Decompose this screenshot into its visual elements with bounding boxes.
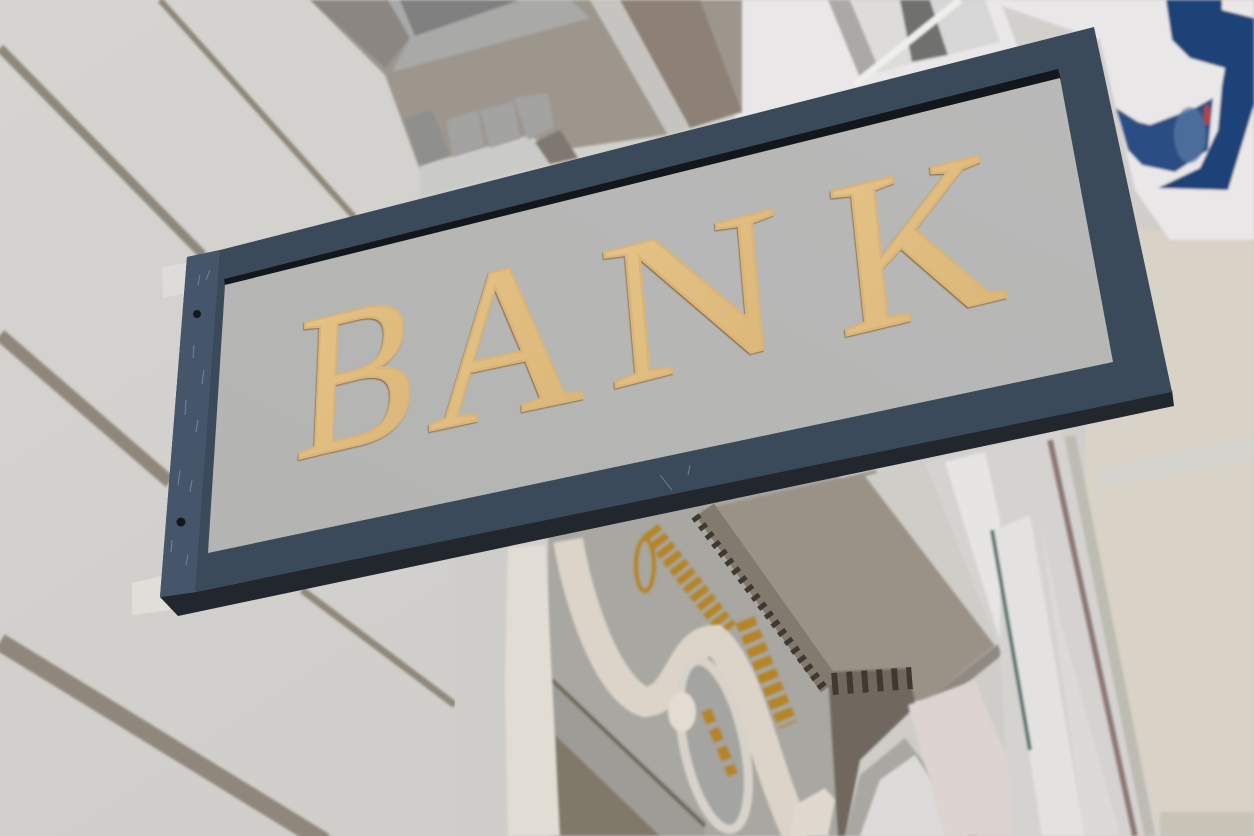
gilded lettering on shopfront [636, 530, 788, 725]
letter A: A [422, 204, 586, 479]
white carved garland column [505, 540, 835, 836]
letter N: N [593, 160, 793, 434]
bank lettering [292, 101, 1013, 506]
flag at top right [985, 0, 1254, 240]
sign speckles [171, 270, 690, 565]
eave canopy at right [700, 462, 1010, 836]
far building at right [1085, 230, 1254, 836]
sign underside [160, 390, 1174, 616]
sign left frame side [160, 250, 220, 597]
wall mounting brackets [132, 263, 187, 615]
bank sign [160, 27, 1174, 616]
frame screws [176, 310, 201, 526]
letter K: K [820, 101, 1013, 385]
dentil blocks under cornice [404, 93, 578, 166]
building facade and pipes at right [908, 430, 1160, 836]
sign outer frame [160, 27, 1172, 597]
pilaster beside doorway [455, 540, 510, 836]
stone cornice at top [310, 0, 742, 198]
upper white wall and windows at top [700, 0, 1100, 300]
sign inner panel [208, 78, 1113, 553]
lower shopfront panel [548, 470, 840, 836]
wall stone grooves [0, 0, 455, 836]
letter B: B [292, 246, 425, 506]
chevron frieze [695, 510, 912, 690]
inner top shadow band [224, 69, 1061, 285]
